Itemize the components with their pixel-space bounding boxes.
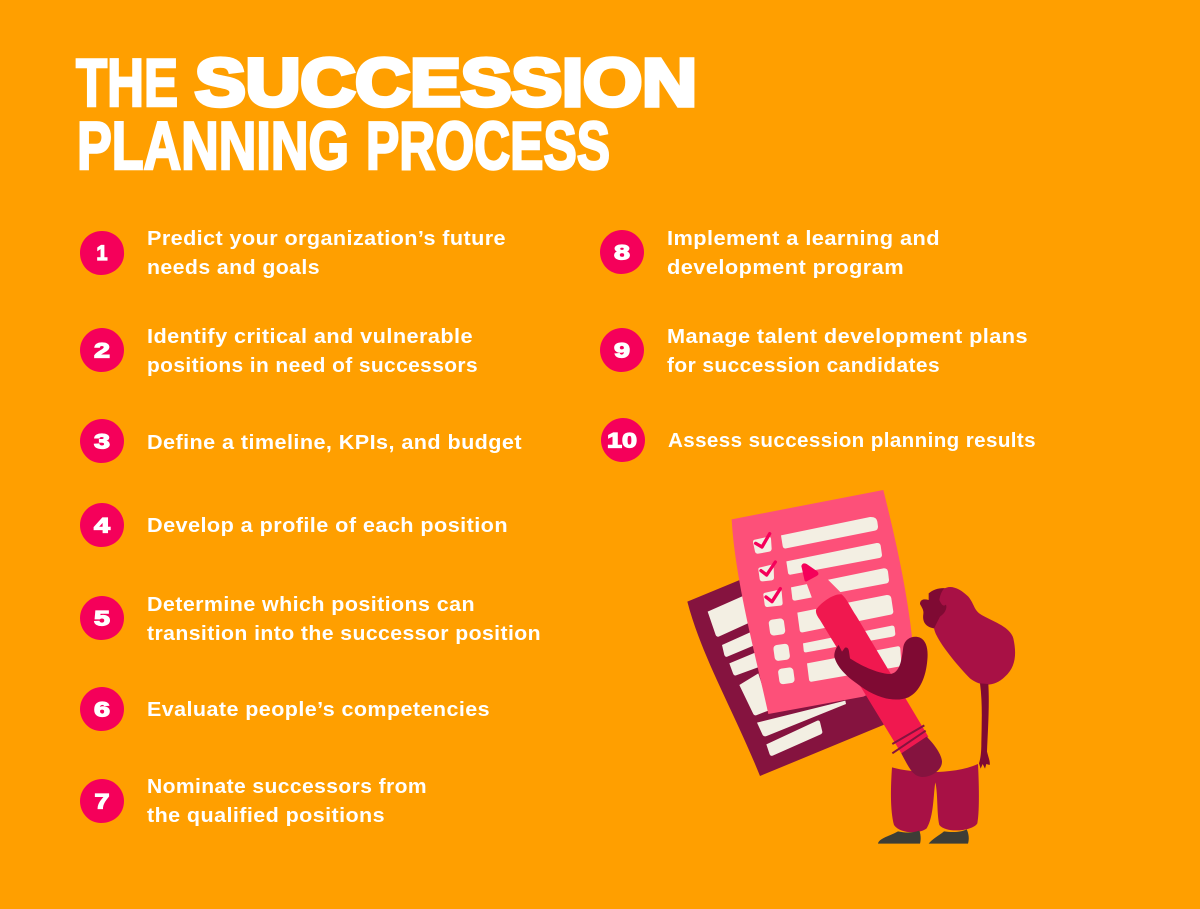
head and hair: [920, 587, 1015, 685]
step 7: 7: [94, 790, 110, 814]
arm and hand: [834, 637, 928, 700]
step 10: [601, 418, 1036, 462]
step 4: 4: [94, 514, 110, 538]
shoes: [878, 829, 969, 844]
step 9: Manage talent development plans: [667, 325, 1028, 348]
step 5: Determine which positions can: [147, 593, 475, 616]
step 2: [80, 325, 478, 377]
title: PROCESS: [366, 108, 610, 184]
step 3: [80, 419, 522, 463]
trousers: [891, 764, 979, 832]
step 9: [600, 325, 1028, 377]
step 2: 2: [94, 340, 110, 362]
step 8: [600, 227, 940, 279]
title: SUCCESSION: [195, 46, 697, 120]
step 3: 3: [94, 430, 110, 454]
step 7: the qualified positions: [147, 804, 385, 827]
step 2: Identify critical and vulnerable: [147, 325, 473, 348]
pencil: [801, 563, 942, 777]
step 8: Implement a learning and: [667, 227, 940, 250]
step 10: Assess succession planning results: [668, 429, 1036, 452]
step 6: 6: [94, 698, 110, 722]
title: THE: [76, 45, 178, 121]
step 6: Evaluate people’s competencies: [147, 698, 490, 721]
step 5: [80, 593, 541, 645]
step 5: transition into the successor position: [147, 622, 541, 645]
title: [76, 45, 697, 184]
step 1: [80, 227, 506, 279]
step 4: Develop a profile of each position: [147, 514, 508, 537]
step 5: 5: [94, 608, 110, 630]
step 10: 10: [607, 430, 637, 452]
step 1: 1: [96, 242, 108, 265]
step 6: [80, 687, 490, 731]
back sheet: [687, 572, 893, 776]
step 2: positions in need of successors: [147, 354, 478, 377]
step 8: development program: [667, 256, 904, 279]
step 3: Define a timeline, KPIs, and budget: [147, 431, 522, 454]
back arm: [979, 683, 990, 769]
step 1: Predict your organization’s future: [147, 227, 506, 250]
step 9: for succession candidates: [667, 354, 940, 377]
step 4: [80, 503, 508, 547]
title: PLANNING: [77, 108, 349, 184]
step 7: Nominate successors from: [147, 775, 427, 798]
step 7: [80, 775, 427, 827]
step 8: 8: [614, 242, 630, 264]
step 1: needs and goals: [147, 256, 320, 279]
illustration: person with checklist and pencil: [687, 490, 1015, 844]
step 9: 9: [614, 340, 630, 362]
front checklist sheet: [732, 490, 912, 714]
